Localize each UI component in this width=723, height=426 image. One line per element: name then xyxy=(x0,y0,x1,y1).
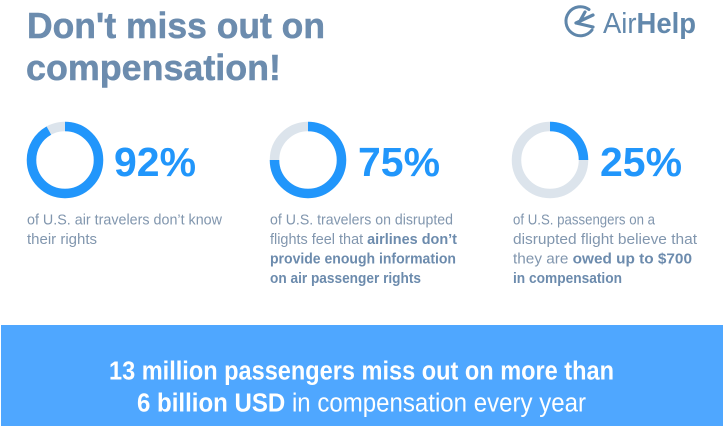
title: Don't miss out on xyxy=(27,5,325,46)
title xyxy=(26,5,325,88)
description: of U.S. passengers on a xyxy=(513,212,656,228)
description: provide enough information xyxy=(270,252,456,268)
panel: 25% stat xyxy=(513,126,697,287)
description: they are owed up to $700 xyxy=(513,252,685,268)
title: compensation! xyxy=(26,47,281,88)
percentage: 92%: 92% xyxy=(114,139,196,185)
percentage: 25%: 25% xyxy=(600,139,682,185)
donut chart: 92% xyxy=(32,126,98,194)
description: in compensation xyxy=(513,271,622,287)
banner xyxy=(1,325,723,426)
description: disrupted flight believe that xyxy=(513,232,697,248)
banner text: 6 billion USD in compensation every year xyxy=(137,390,604,418)
donut chart: 75% xyxy=(274,126,342,194)
description: their rights xyxy=(27,232,97,248)
donut chart: 25% xyxy=(516,126,584,194)
description: of U.S. travelers on disrupted xyxy=(270,212,453,228)
percentage: 75%: 75% xyxy=(358,139,440,185)
panel: 75% stat xyxy=(270,126,457,287)
wordmark: AirHelp xyxy=(603,8,696,40)
banner text: 13 million passengers miss out on more than xyxy=(109,358,614,386)
panel: 92% stat xyxy=(27,126,223,248)
logo: AirHelp xyxy=(566,7,696,40)
icon: plane in circle xyxy=(566,7,593,36)
description: of U.S. air travelers don’t know xyxy=(27,212,223,228)
description: flights feel that airlines don’t xyxy=(270,232,457,248)
description: on air passenger rights xyxy=(270,271,421,287)
